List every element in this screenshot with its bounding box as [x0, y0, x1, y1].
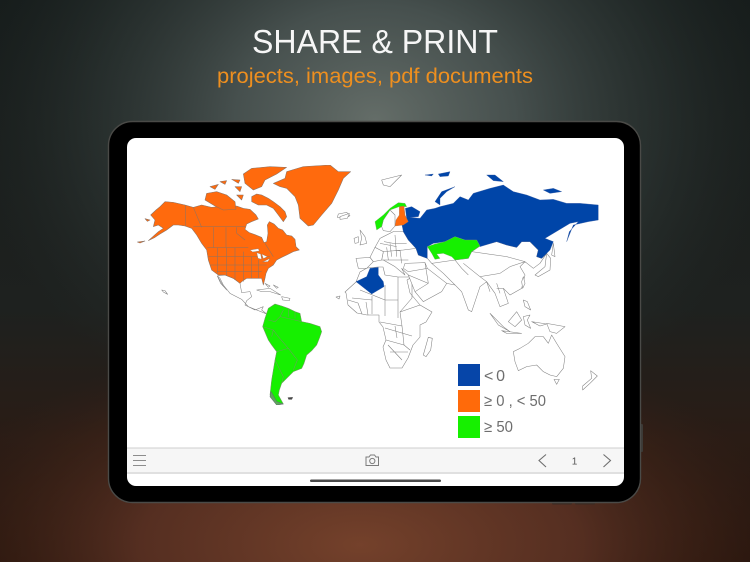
home indicator	[310, 480, 441, 482]
title: SHARE & PRINT	[252, 23, 498, 60]
world map	[137, 165, 598, 405]
icon: menu	[133, 456, 146, 466]
Russia: blue	[356, 172, 598, 294]
legend	[458, 364, 546, 438]
Great Lakes	[250, 249, 270, 262]
Algeria: blue	[356, 267, 384, 294]
tablet device	[108, 122, 643, 504]
legend: fifty and above: ≥ 50	[484, 419, 513, 436]
Kazakhstan and Norway: green	[375, 203, 480, 260]
legend: below zero: < 0	[484, 368, 505, 385]
icon: camera	[366, 455, 378, 466]
Southeast Asia and Oceania	[490, 300, 597, 390]
legend: zero to fifty: ≥ 0 , < 50	[484, 393, 546, 410]
bottom toolbar	[127, 448, 624, 474]
subtitle: projects, images, pdf documents	[217, 64, 533, 88]
Finland: orange	[395, 206, 408, 226]
Africa	[336, 267, 432, 368]
page number: 1	[572, 456, 578, 468]
Americas: white countries	[162, 212, 350, 314]
tablet screen	[127, 138, 624, 486]
Eurasia: white countries	[340, 175, 555, 312]
North America and Greenland: orange	[137, 165, 351, 285]
icon: previous page arrow	[539, 454, 546, 467]
South America: green	[263, 304, 322, 405]
icon: next page arrow	[604, 454, 610, 467]
